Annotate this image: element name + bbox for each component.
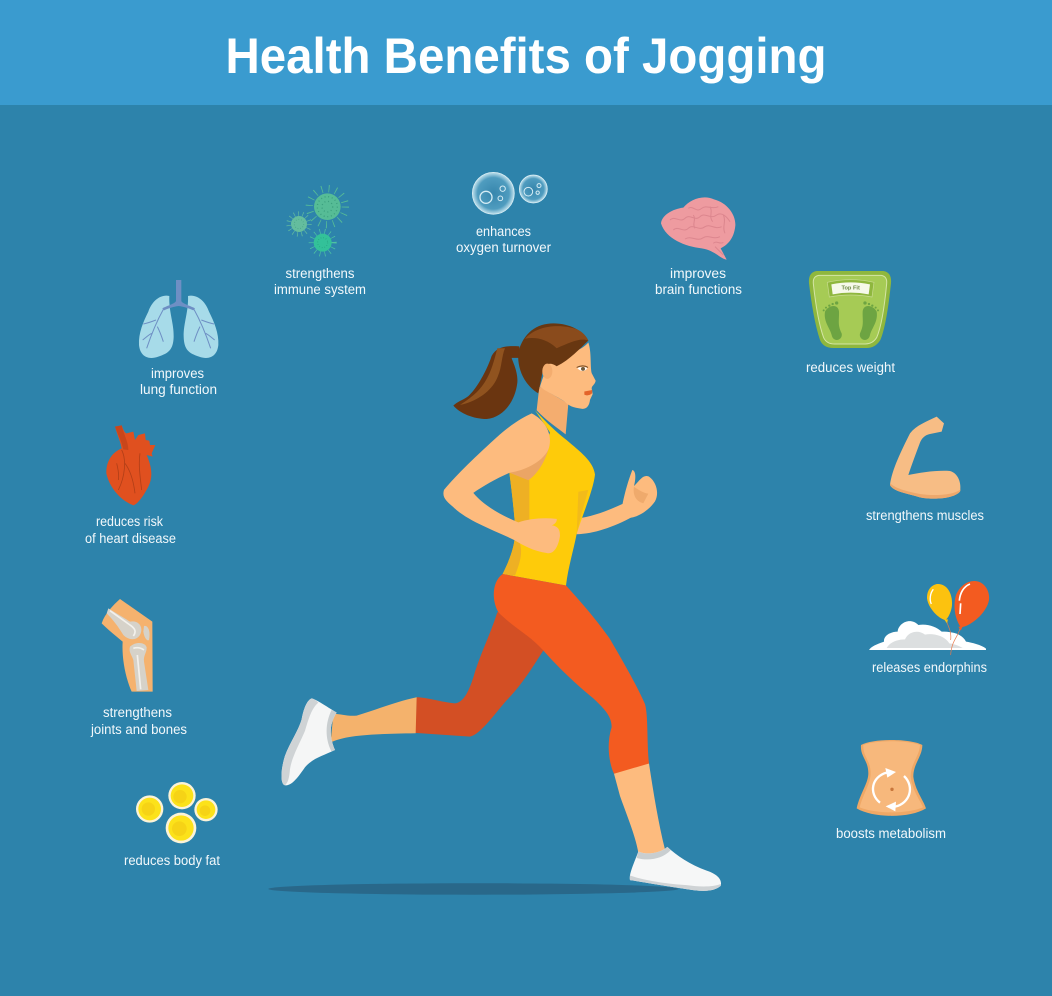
- label: reduces risk of heart disease: of heart disease: [85, 531, 176, 546]
- label: reduces risk of heart disease: [85, 514, 176, 546]
- icon: virus: [289, 189, 345, 254]
- icon: fat cells: [136, 782, 218, 843]
- label: improves lung function: lung function: [140, 382, 217, 397]
- label: strengthens joints and bones: joints and bones: [90, 722, 187, 737]
- icon: balloons over cloud: [869, 581, 989, 655]
- benefit: oxygen turnover: [456, 172, 552, 255]
- icon: brain: [661, 197, 735, 260]
- icon: bathroom scale: Top Fit: [841, 285, 860, 291]
- label: strengthens muscles: strengthens muscles: [866, 508, 984, 523]
- benefit: heart disease: [85, 425, 176, 546]
- label: boosts metabolism: boosts metabolism: [836, 826, 946, 841]
- label: improves brain functions: brain functions: [655, 282, 742, 297]
- ponytail: [453, 346, 519, 419]
- benefit: lung function: [139, 280, 218, 397]
- label: enhances oxygen turnover: [456, 224, 552, 255]
- title banner: [0, 0, 1052, 105]
- label: reduces weight: reduces weight: [806, 360, 895, 375]
- ear: [542, 364, 552, 379]
- hair: [518, 323, 588, 393]
- label: reduces risk of heart disease: reduces risk: [96, 514, 163, 529]
- icon: belly with cycle arrows: [857, 740, 926, 816]
- label: strengthens joints and bones: strengthens: [103, 705, 172, 720]
- benefit: boosts metabolism: [836, 740, 946, 841]
- far arm: [577, 470, 657, 534]
- label: enhances oxygen turnover: oxygen turnover: [456, 240, 552, 255]
- far leg: [331, 612, 543, 742]
- label: improves brain functions: improves: [670, 266, 726, 281]
- label: releases endorphins: releases endorphins: [872, 660, 987, 675]
- benefit: releases endorphins: [869, 581, 989, 675]
- label: strengthens joints and bones: [90, 705, 187, 737]
- runner figure: [268, 323, 721, 895]
- benefit: body fat: [124, 782, 220, 868]
- icon: heart: [106, 425, 155, 505]
- label: strengthens immune system: immune system: [274, 282, 366, 297]
- front shoe: [630, 847, 721, 891]
- near leg: [494, 574, 665, 854]
- near arm: [443, 413, 560, 553]
- label: reduces body fat: reduces body fat: [124, 853, 220, 868]
- rear shoe: [281, 698, 337, 785]
- benefit: immune system: [274, 189, 366, 297]
- benefit: reduces weight: [806, 271, 895, 375]
- icon: knee joint: [102, 599, 153, 692]
- neck and face: [537, 343, 596, 434]
- icon: flexed arm: [890, 417, 961, 499]
- label: strengthens immune system: strengthens: [286, 266, 355, 281]
- benefit: brain functions: [655, 197, 742, 297]
- benefit: joints and bones: [90, 599, 187, 737]
- icon: lungs: [139, 280, 218, 358]
- label: improves lung function: [140, 366, 217, 397]
- title banner: Health Benefits of Jogging: [226, 28, 826, 84]
- label: improves lung function: improves: [151, 366, 204, 381]
- ground shadow: [268, 883, 678, 895]
- torso tank top: [503, 410, 595, 586]
- benefit: strengthens muscles: [866, 417, 984, 523]
- label: improves brain functions: [655, 266, 742, 297]
- icon: oxygen bubbles: [472, 172, 547, 214]
- label: strengthens immune system: [274, 266, 366, 297]
- label: enhances oxygen turnover: enhances: [476, 224, 531, 239]
